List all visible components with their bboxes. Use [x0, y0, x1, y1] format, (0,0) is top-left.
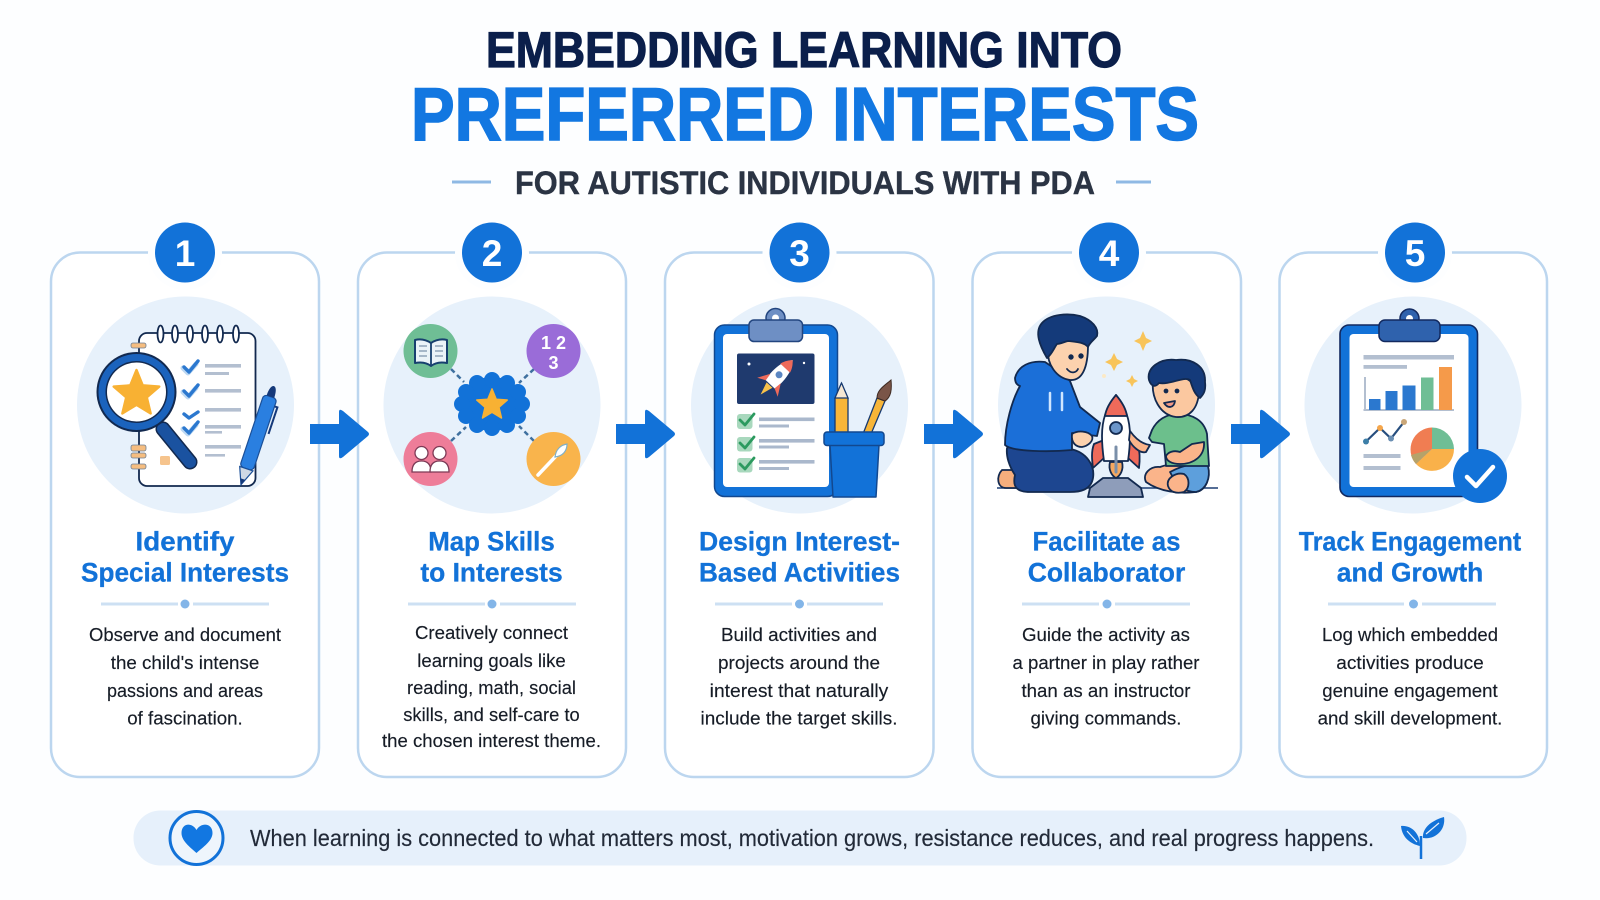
- heading: Map Skills: [428, 526, 555, 556]
- step number 3: [762, 216, 836, 290]
- heading: [1299, 526, 1521, 588]
- description: include the target skills.: [700, 708, 898, 728]
- callout text: When learning is connected to what matters most, motivation grows, resistance reduces, and real progress happens.: [250, 825, 1374, 851]
- description: and skill development.: [1318, 708, 1502, 728]
- callout banner: [134, 810, 1466, 866]
- description: [1318, 624, 1502, 728]
- heading: [699, 526, 900, 588]
- step number 1: [148, 216, 222, 290]
- description: learning goals like: [417, 650, 566, 671]
- description: genuine engagement: [1322, 680, 1498, 701]
- description: the chosen interest theme.: [382, 730, 601, 751]
- heading: and Growth: [1337, 558, 1483, 588]
- description: giving commands.: [1030, 708, 1182, 728]
- sparkles: [1102, 331, 1152, 387]
- step number 1: 1: [175, 233, 195, 274]
- icon: adult and child building a rocket together: [997, 296, 1218, 514]
- step number 5: 5: [1405, 233, 1425, 274]
- icon: people: [404, 432, 458, 486]
- description: Guide the activity as: [1022, 624, 1190, 645]
- icon: sprout: [1401, 817, 1444, 859]
- description: passions and areas: [107, 680, 263, 701]
- description: projects around the: [718, 652, 880, 673]
- panel: step 4 facilitate as collaborator: [972, 216, 1241, 777]
- arrow 1 to 2: [310, 410, 369, 458]
- icon: heart: [170, 812, 223, 864]
- arrow 4 to 5: [1231, 410, 1290, 458]
- step number 3: 3: [789, 233, 810, 274]
- panel: step 1 identify special interests: [51, 216, 319, 777]
- title: [411, 22, 1199, 156]
- description: [382, 622, 601, 751]
- icon: notebook with magnifying glass and pen: [77, 296, 294, 514]
- icon: numbers: 3: [548, 353, 559, 373]
- description: Build activities and: [721, 624, 877, 645]
- description: of fascination.: [127, 708, 243, 728]
- heading: [81, 526, 289, 588]
- description: [89, 624, 281, 728]
- description: Creatively connect: [415, 622, 568, 643]
- heading: Special Interests: [81, 558, 289, 588]
- icon: toothbrush: [526, 432, 580, 486]
- title: EMBEDDING LEARNING INTO: [486, 22, 1122, 78]
- heading: [420, 526, 563, 588]
- icon: skills network around a star: [384, 296, 600, 514]
- icon: numbers: 1 2: [541, 333, 566, 353]
- description: a partner in play rather: [1012, 652, 1200, 673]
- step number 2: 2: [482, 233, 502, 274]
- icon: book: [404, 324, 458, 378]
- heading: [1028, 526, 1186, 588]
- heading: Design Interest-: [699, 526, 900, 556]
- description: Log which embedded: [1322, 624, 1498, 645]
- rocket: [1088, 395, 1143, 497]
- panel: step 3 design interest-based activities: [665, 216, 934, 777]
- child: [1129, 360, 1209, 493]
- step number 5: [1378, 216, 1452, 290]
- description: skills, and self-care to: [403, 704, 580, 725]
- description: [700, 624, 898, 728]
- description: reading, math, social: [407, 677, 576, 698]
- panel: step 2 map skills to interests: [358, 216, 626, 777]
- arrow 3 to 4: [924, 410, 983, 458]
- description: [1012, 624, 1200, 728]
- description: the child's intense: [111, 652, 259, 673]
- heading: Based Activities: [699, 558, 900, 588]
- icon: numbers: [526, 324, 580, 378]
- heading: to Interests: [420, 558, 563, 588]
- description: than as an instructor: [1022, 680, 1190, 701]
- arrow 2 to 3: [616, 410, 675, 458]
- title: PREFERRED INTERESTS: [411, 72, 1199, 156]
- heading: Collaborator: [1028, 558, 1186, 588]
- adult: [998, 314, 1100, 492]
- icon: activity clipboard with rocket and pencil cup: [691, 296, 908, 514]
- heading: Facilitate as: [1032, 526, 1180, 556]
- icon: clipboard with charts and check badge: [1304, 296, 1522, 514]
- step number 4: 4: [1099, 233, 1120, 274]
- panel: step 5 track engagement and growth: [1280, 216, 1547, 777]
- step number 4: [1072, 216, 1146, 290]
- description: activities produce: [1336, 652, 1484, 673]
- heading: Identify: [136, 526, 234, 556]
- heading: Track Engagement: [1299, 526, 1521, 556]
- description: interest that naturally: [710, 680, 889, 701]
- subtitle: FOR AUTISTIC INDIVIDUALS WITH PDA: [515, 165, 1095, 201]
- description: Observe and document: [89, 624, 281, 645]
- step number 2: [455, 216, 529, 290]
